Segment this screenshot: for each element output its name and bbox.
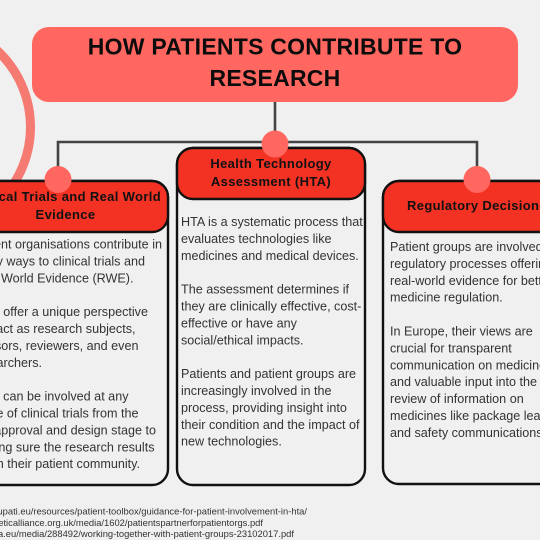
- panel text: regulatory: medicine regulation.: [390, 291, 503, 305]
- panel text: HTA: increasingly involved in the: [181, 384, 332, 398]
- panel text: regulatory: and valuable input into the: [390, 375, 537, 389]
- panel text: HTA: The assessment determines if: [181, 283, 349, 297]
- decorative ring: [0, 22, 30, 232]
- panel heading: clinical trials: Evidence: [36, 207, 95, 222]
- panel text: HTA: they are clinically effective, cost-: [181, 300, 361, 314]
- panel text: HTA: HTA is a systematic process that: [181, 215, 363, 229]
- panel text: clinical trials: [0, 238, 162, 471]
- panel text: regulatory: crucial for transparent: [390, 341, 512, 355]
- panel text: HTA: new technologies.: [181, 435, 282, 449]
- panel heading: clinical trials: [0, 181, 168, 232]
- source links: [0, 506, 307, 539]
- panel text: HTA: medicines and medical devices.: [181, 249, 359, 263]
- panel heading: HTA: Health Technology: [210, 156, 332, 171]
- panel text: HTA: social/ethical impacts.: [181, 333, 304, 347]
- title banner: [32, 27, 518, 102]
- panel: regulatory decisions: [383, 181, 540, 484]
- panel text: HTA: their condition and the impact of: [181, 418, 360, 432]
- panel: health technology assessment: [177, 148, 365, 485]
- title: HOW PATIENTS CONTRIBUTE TO: [88, 34, 462, 60]
- panel text: regulatory: In Europe, their views are: [390, 324, 533, 338]
- panel heading: regulatory: [383, 181, 540, 232]
- panel: clinical trials and real world evidence: [0, 181, 168, 485]
- connector lines: [58, 102, 477, 180]
- title: RESEARCH: [209, 65, 341, 91]
- panel heading: HTA: Assessment (HTA): [211, 174, 331, 189]
- panel text: HTA: evaluates technologies like: [181, 232, 332, 246]
- panel text: HTA: process, providing insight into: [181, 401, 347, 415]
- panel text: regulatory: review of information on: [390, 392, 524, 406]
- panel text: regulatory: [390, 240, 540, 440]
- panel text: HTA: effective or have any: [181, 316, 298, 330]
- panel text: HTA: Patients and patient groups are: [181, 367, 356, 381]
- connector dot: clinical trials: [44, 166, 72, 193]
- panel text: HTA: [181, 215, 363, 449]
- panel heading: HTA: [177, 148, 365, 199]
- connector dot: HTA: [262, 130, 288, 158]
- connector dot: regulatory: [464, 166, 490, 193]
